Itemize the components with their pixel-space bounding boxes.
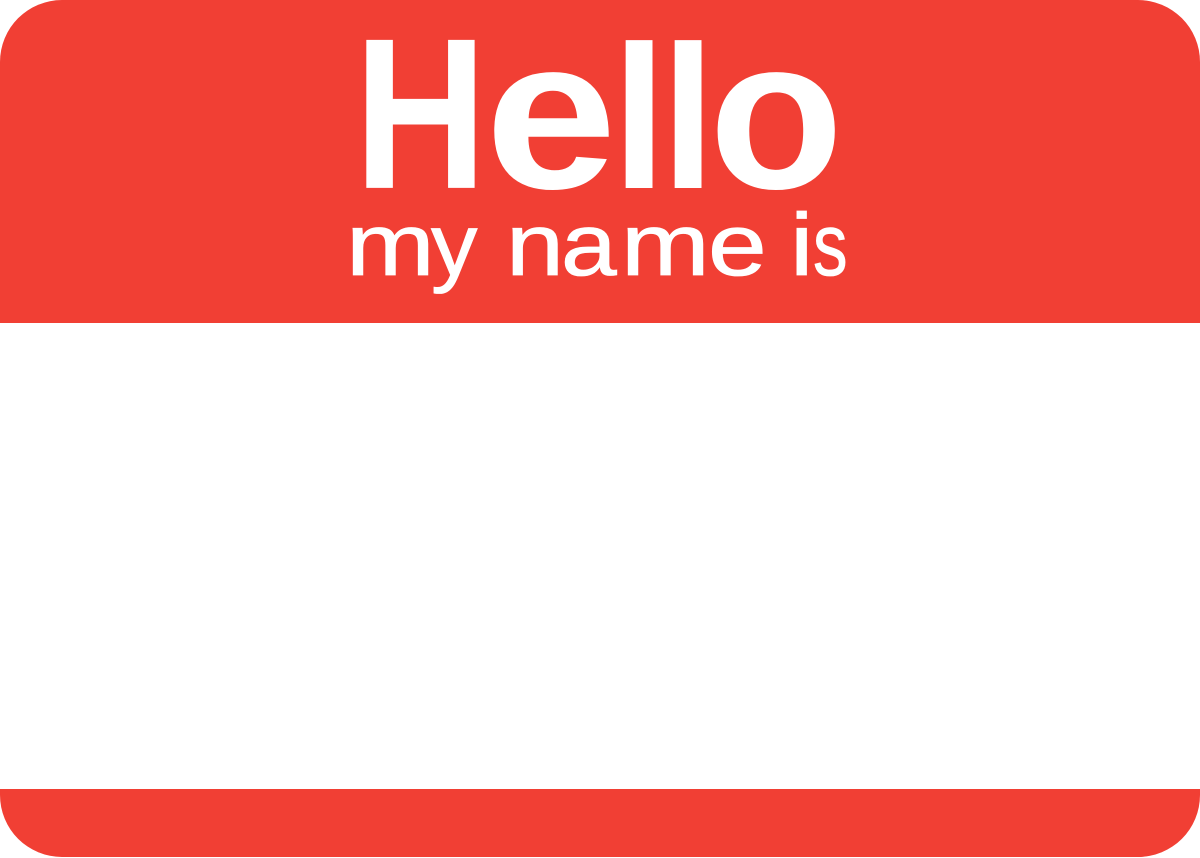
subheading: my name is: s [813,196,847,294]
heading: Hello: l [661,4,716,232]
heading: Hello: o [709,0,843,234]
heading: Hello: l [612,4,667,232]
subheading: my name is: n [506,196,564,294]
subheading: my name is: e [708,196,767,294]
heading: Hello: H [354,0,487,234]
subheading: my name is: i [790,196,813,294]
subheading: my name is: a [561,196,617,294]
subheading: my name is: m [621,196,710,294]
subheading: my name is: y [431,196,478,294]
subheading: my name is: m [346,196,434,294]
white writing area [0,323,1200,789]
heading: Hello: e [485,0,617,234]
subheading: my name is [346,196,847,294]
heading: Hello [354,0,843,234]
